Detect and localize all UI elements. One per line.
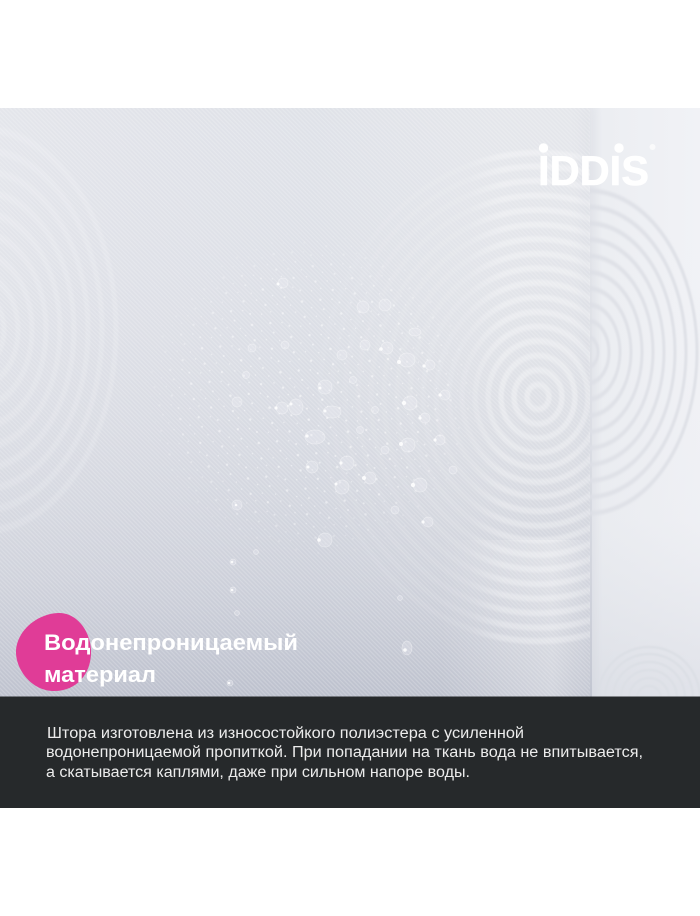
bottom right ring pattern <box>598 647 700 749</box>
central spiral ring pattern <box>484 245 590 644</box>
water droplets <box>166 255 457 686</box>
heading: материал <box>44 662 156 687</box>
pink accent blob <box>16 613 91 691</box>
description text: а скатывается каплями, даже при сильном напоре воды. <box>46 764 470 781</box>
right ring pattern <box>594 190 698 514</box>
left ring pattern <box>0 129 116 531</box>
heading <box>44 630 298 687</box>
fabric weave texture <box>0 469 590 696</box>
fold shading <box>582 108 592 697</box>
description text: водонепроницаемой пропиткой. При попадании на ткань вода не впитывается, <box>46 744 643 761</box>
description text <box>46 725 643 781</box>
photo: shower curtain fabric <box>0 108 700 749</box>
logo: IDDIS: IDDIS <box>538 147 649 194</box>
heading: Водонепроницаемый <box>44 630 298 655</box>
description text: Штора изготовлена из износостойкого полиэстера с усиленной <box>47 725 524 742</box>
dark description band <box>0 696 700 808</box>
